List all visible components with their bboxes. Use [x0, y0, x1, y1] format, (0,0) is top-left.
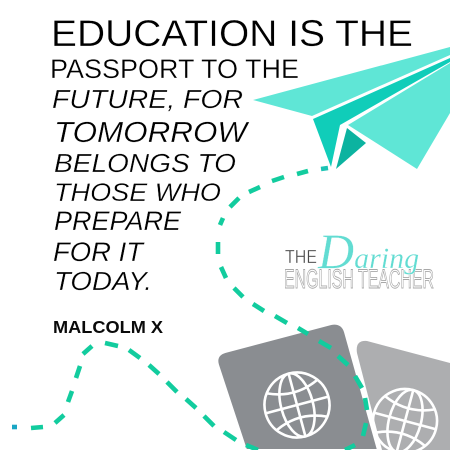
logo: The Daring English Teacher: Daring	[317, 223, 419, 279]
logo: The Daring English Teacher	[284, 223, 434, 294]
passport: front dark grey	[217, 324, 378, 450]
line: today: TODAY.	[54, 266, 152, 296]
icon: globe on back passport	[372, 388, 438, 450]
line: passport to the: PASSPORT TO THE	[50, 54, 299, 84]
line: future, for: FUTURE, FOR	[52, 84, 243, 114]
icon: globe on front passport	[263, 371, 331, 439]
attribution: MALCOLM X	[53, 317, 163, 337]
line: tomorrow: TOMORROW	[54, 117, 250, 149]
logo: The Daring English Teacher: THE	[285, 247, 317, 267]
line: prepare: PREPARE	[54, 206, 182, 236]
line: those who: THOSE WHO	[54, 179, 221, 207]
icon: paper plane	[253, 47, 450, 169]
dashed flight path	[12, 168, 367, 450]
line: for it: FOR IT	[53, 237, 146, 267]
heading line: EDUCATION IS THE	[51, 13, 413, 54]
line: belongs to: BELONGS TO	[54, 148, 236, 178]
passport: back light grey	[357, 341, 450, 450]
quote text	[50, 13, 413, 296]
